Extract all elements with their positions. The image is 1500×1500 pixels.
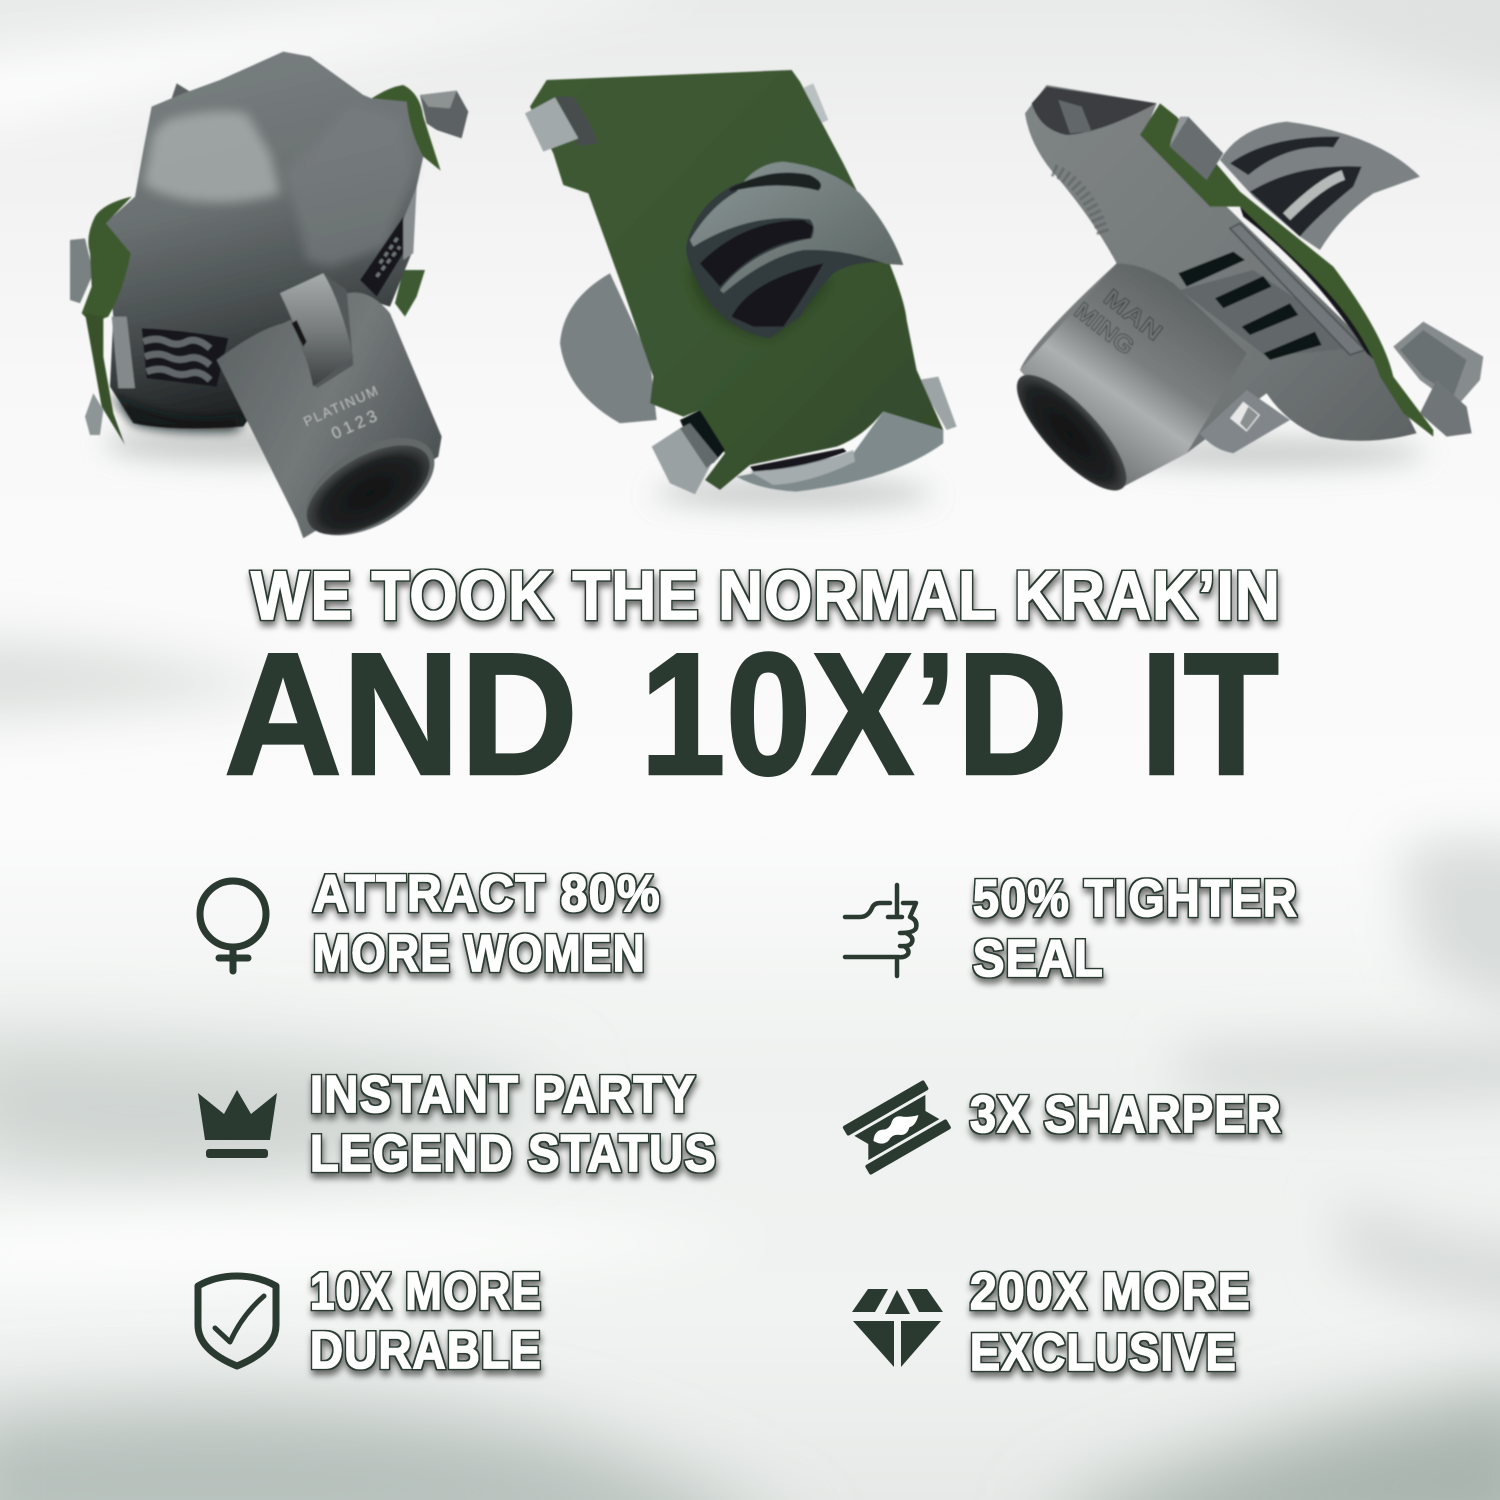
icon: razor blade bbox=[842, 1080, 952, 1175]
text: 50% tighter seal bbox=[973, 870, 1298, 988]
product 2: green seal and claw bbox=[525, 70, 957, 508]
text: 200x more exclusive: 200X MORE bbox=[970, 1263, 1251, 1321]
engraving: PLATINUM 0123: PLATINUM bbox=[301, 383, 382, 429]
heading: we took the normal krak'in: WE TOOK THE NORMAL KRAK’IN bbox=[251, 557, 1281, 634]
feature: attract 80% more women bbox=[200, 865, 661, 983]
feature: 3x sharper bbox=[842, 1080, 1282, 1175]
engraving: PLATINUM 0123: 0123 bbox=[328, 405, 383, 443]
icon: crown bbox=[198, 1090, 277, 1158]
feature: 200x more exclusive bbox=[852, 1263, 1251, 1382]
text: instant party legend status: LEGEND STATUS bbox=[310, 1125, 717, 1183]
title: and 10x'd it bbox=[224, 616, 1279, 811]
text: 10x more durable: 10X MORE bbox=[310, 1263, 542, 1321]
text: 200x more exclusive: EXCLUSIVE bbox=[970, 1324, 1237, 1382]
title: and 10x'd it: AND bbox=[224, 616, 578, 811]
text: 50% tighter seal: SEAL bbox=[973, 930, 1104, 988]
text: attract 80% more women: MORE WOMEN bbox=[313, 925, 646, 983]
icon: shield with check bbox=[198, 1276, 276, 1366]
icon: female symbol bbox=[200, 881, 266, 971]
engraving: HUMAN MING bbox=[1069, 275, 1167, 369]
icon: diamond bbox=[852, 1289, 943, 1367]
product photos row bbox=[70, 52, 1483, 555]
text: attract 80% more women bbox=[313, 865, 661, 983]
feature: instant party legend status bbox=[198, 1066, 717, 1183]
title: and 10x'd it: 10X’D bbox=[640, 616, 1068, 811]
text: instant party legend status bbox=[310, 1066, 717, 1183]
engraving: HUMAN MING: MING bbox=[1069, 297, 1139, 361]
icon: gripping fist bbox=[845, 885, 916, 976]
engraving: HUMAN MING: MAN bbox=[1098, 284, 1167, 347]
feature: 50% tighter seal bbox=[845, 870, 1298, 988]
text: 10x more durable bbox=[310, 1263, 542, 1380]
text: 50% tighter seal: 50% TIGHTER bbox=[973, 870, 1298, 928]
product 3: side view bbox=[1001, 85, 1483, 505]
engraving: PLATINUM 0123 bbox=[301, 383, 392, 452]
feature: 10x more durable bbox=[198, 1263, 542, 1380]
text: instant party legend status: INSTANT PARTY bbox=[310, 1066, 696, 1124]
text: 10x more durable: DURABLE bbox=[310, 1322, 542, 1380]
text: attract 80% more women: ATTRACT 80% bbox=[313, 865, 661, 923]
text: 3x sharper: 3X SHARPER bbox=[970, 1086, 1282, 1144]
text: 200x more exclusive bbox=[970, 1263, 1251, 1382]
title: and 10x'd it: IT bbox=[1140, 616, 1279, 811]
product 1: mouthpiece front view bbox=[70, 52, 468, 555]
